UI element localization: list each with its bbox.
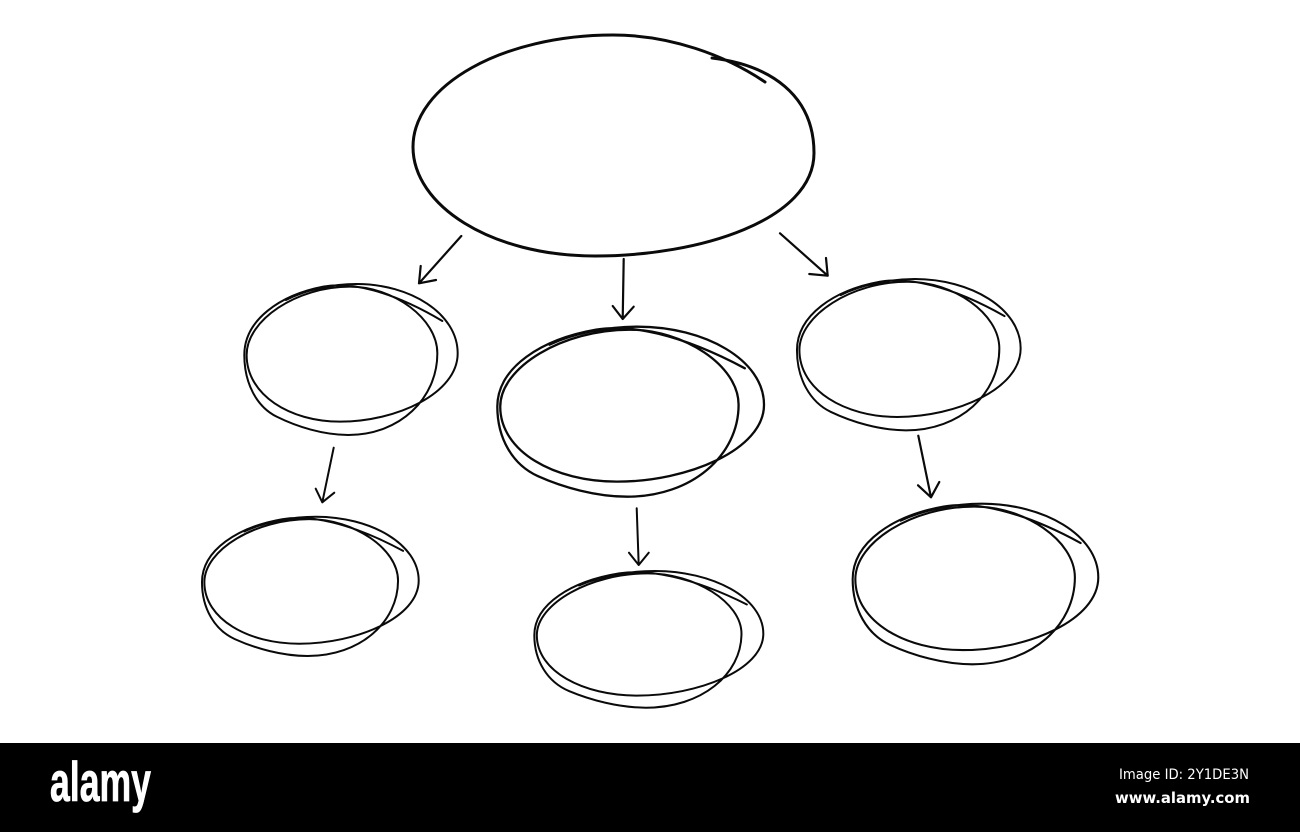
website: www.alamy.com — [1115, 789, 1250, 807]
alamy logo: alamy — [50, 750, 151, 813]
right lower scribble oval — [853, 504, 1098, 664]
arrow: right upper oval to right lower oval — [918, 436, 939, 497]
right upper scribble oval — [797, 279, 1021, 430]
image ID: Image ID: 2Y1DE3N — [1119, 767, 1249, 783]
top oval node — [413, 35, 814, 256]
centre lower scribble oval — [534, 571, 763, 708]
watermark footer band — [0, 743, 1300, 832]
arrow: top oval to right oval — [780, 233, 828, 276]
left upper scribble oval — [244, 284, 458, 435]
arrow: centre upper oval to centre lower oval — [629, 508, 649, 565]
arrow: left upper oval to left lower oval — [316, 448, 334, 502]
left lower scribble oval — [202, 517, 419, 656]
arrow: top oval to centre oval — [613, 259, 634, 319]
arrow: top oval to left oval — [419, 236, 461, 283]
centre upper scribble oval — [497, 327, 764, 497]
